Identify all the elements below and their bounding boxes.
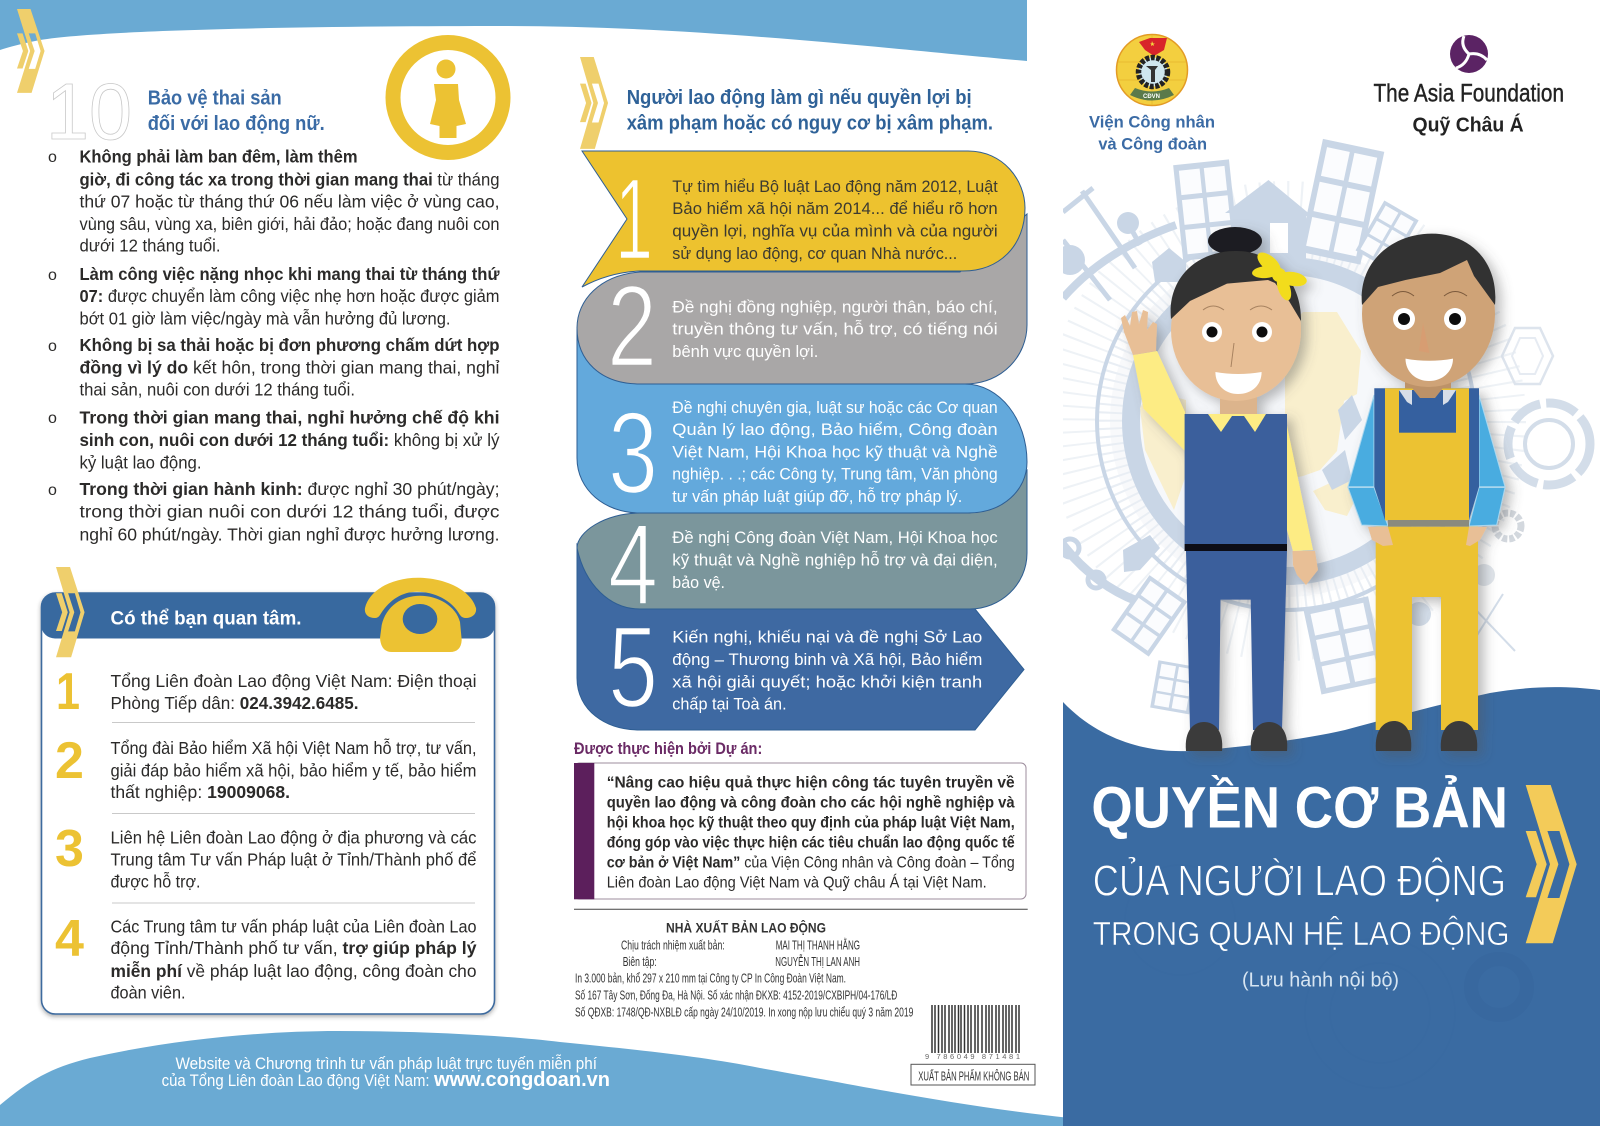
panel: project description: “Nâng cao hiệu quả thực hiện công tác tuyên truyền về <box>607 774 1015 791</box>
bulleted list: maternity rights: thai sản, nuôi con dưới 12 tháng tuổi. <box>80 380 355 400</box>
cover title: QUYỀN CƠ BẢN <box>1091 775 1508 840</box>
item 2 <box>55 732 476 802</box>
step 4 ribbon <box>577 470 1027 609</box>
institute name: Viện Công nhân <box>1089 112 1215 131</box>
foundation name: The Asia Foundation <box>1374 80 1564 108</box>
bulleted list: maternity rights: Không phải làm ban đêm, làm thêm <box>80 146 358 166</box>
top blue band <box>0 0 1027 61</box>
background illustration: globe, wheel and buildings <box>1055 143 1590 713</box>
bulleted list: maternity rights: trong thời gian nuôi con dưới 12 tháng tuổi, được <box>80 502 500 522</box>
bottom blue band <box>0 1031 1070 1126</box>
logo: union institute: CĐVN <box>1143 94 1160 100</box>
belt <box>1185 544 1287 551</box>
bulleted list: maternity rights: sinh con, nuôi con dưới 12 tháng tuổi: không bị xử lý <box>80 430 500 450</box>
publisher information: Số 167 Tây Sơn, Đống Đa, Hà Nội. Số xác nhận ĐKXB: 4152-2019/CXBIPH/04-176/LĐ <box>575 987 897 1002</box>
bulleted list: maternity rights: 07: được chuyển làm công việc nhẹ hơn hoặc được giảm <box>80 286 500 306</box>
heading: maternity protection <box>148 88 325 135</box>
publisher information: NGUYỄN THỊ LAN ANH <box>775 954 860 969</box>
item 2: Tổng đài Bảo hiểm Xã hội Việt Nam hỗ trợ, tư vấn, <box>110 737 476 758</box>
eyes <box>1202 322 1272 342</box>
publisher information <box>575 920 913 1020</box>
hands <box>1368 527 1393 546</box>
icon: top-left chevron <box>17 9 45 93</box>
item 1: Tổng Liên đoàn Lao động Việt Nam: Điện thoại <box>110 671 476 691</box>
neck <box>1405 378 1451 398</box>
bulleted list: maternity rights: giờ, đi công tác xa trong thời gian mang thai từ tháng <box>80 170 500 190</box>
cover title <box>1091 775 1510 952</box>
logo: union institute <box>1116 34 1188 106</box>
footer website text: www.congdoan.vn <box>433 1069 610 1091</box>
step 3 number and text: tư vấn pháp luật giúp đỡ, hỗ trợ pháp lý. <box>672 487 962 506</box>
hair ornament <box>1252 249 1308 302</box>
item 3: Liên hệ Liên đoàn Lao động ở địa phương và các <box>110 827 477 847</box>
publisher information: Chịu trách nhiệm xuất bản: <box>621 937 725 952</box>
blue lower cover area <box>1063 687 1600 1126</box>
step 5 ribbon <box>577 544 1024 730</box>
item 4: 4 <box>55 910 84 968</box>
icon: cover chevron <box>1526 785 1577 943</box>
panel: cover <box>1063 139 1600 1126</box>
step 3 number and text: Đề nghị chuyên gia, luật sư hoặc các Cơ quan <box>672 398 998 417</box>
step 4 number and text: kỹ thuật và Nghề nghiệp hỗ trợ và đại diện, <box>672 550 998 569</box>
trousers <box>1186 551 1287 730</box>
vest <box>1185 414 1287 544</box>
step 5 number and text: Kiến nghị, khiếu nại và đề nghị Sở Lao <box>672 628 982 647</box>
footer website text: của Tổng Liên đoàn Lao động Việt Nam: <box>162 1072 430 1090</box>
step 3 number and text: Quản lý lao động, Bảo hiểm, Công đoàn <box>672 420 998 439</box>
barcode <box>925 1005 1020 1061</box>
panel: project description <box>574 763 1026 899</box>
step 1 number and text: sử dụng lao động, cơ quan Nhà nước... <box>672 244 957 263</box>
heading: what workers should do: Người lao động làm gì nếu quyền lợi bị <box>627 87 972 109</box>
trousers <box>1376 527 1478 730</box>
step 3 ribbon <box>577 330 1027 513</box>
face <box>1171 259 1301 401</box>
bulleted list: maternity rights: kỷ luật lao động. <box>80 452 202 472</box>
step 5 number and text: chấp tại Toà án. <box>672 695 787 714</box>
bulleted list: maternity rights: o <box>48 267 57 284</box>
overall bib <box>1385 388 1469 520</box>
bulleted list: maternity rights: đồng vì lý do kết hôn, trong thời gian mang thai, nghỉ <box>80 358 500 378</box>
step 1 ribbon <box>582 151 1025 287</box>
step 1 number and text: quyền lợi, nghĩa vụ của mình và của người <box>672 221 998 240</box>
step 4 number and text <box>608 500 998 630</box>
contact header bar <box>41 592 495 638</box>
bulleted list: maternity rights: dưới 12 tháng tuổi. <box>80 236 220 256</box>
panel: project description: cơ bản ở Việt Nam” của Viện Công nhân và Công đoàn – Tổng <box>607 855 1015 872</box>
smile <box>1406 359 1453 381</box>
barcode: 9 786049 871481 <box>925 1052 1020 1061</box>
publisher information: In 3.000 bản, khổ 297 x 210 mm tại Công ty CP In Công Đoàn Việt Nam. <box>575 970 846 985</box>
neck <box>1220 395 1257 417</box>
sleeves <box>1348 395 1505 526</box>
ribbon: five steps <box>577 151 1027 730</box>
collar <box>1208 414 1266 432</box>
bulleted list: maternity rights <box>48 146 500 544</box>
belt <box>1388 520 1469 527</box>
contact heading: Có thể bạn quan tâm. <box>110 608 302 629</box>
step 2 ribbon <box>577 214 1027 384</box>
step 5 number and text: xã hội giải quyết; hoặc khởi kiện tranh <box>672 672 982 691</box>
big outlined number 10: 10 <box>46 67 132 156</box>
smile <box>1215 372 1262 394</box>
publisher information: Biên tập: <box>623 954 657 969</box>
step 2 number and text: truyền thông tư vấn, hỗ trợ, có tiếng nói <box>672 320 998 339</box>
stamp: not for sale: XUẤT BẢN PHẨM KHÔNG BÁN <box>918 1069 1029 1084</box>
character: woman <box>1121 227 1318 751</box>
panel: project description: Liên đoàn Lao động Việt Nam và Quỹ châu Á tại Việt Nam. <box>607 875 987 892</box>
bun <box>1208 227 1262 255</box>
bulleted list: maternity rights: Làm công việc nặng nhọc khi mang thai từ tháng thứ <box>80 264 500 284</box>
cover title: CỦA NGƯỜI LAO ĐỘNG <box>1093 855 1506 906</box>
cover title: TRONG QUAN HỆ LAO ĐỘNG <box>1093 915 1510 952</box>
heading: what workers should do: xâm phạm hoặc có nguy cơ bị xâm phạm. <box>627 112 993 134</box>
bulleted list: maternity rights: o <box>48 482 57 499</box>
publisher information: NHÀ XUẤT BẢN LAO ĐỘNG <box>666 920 826 935</box>
step 4 number and text: Đề nghị Công đoàn Việt Nam, Hội Khoa học <box>672 528 998 547</box>
bulleted list: maternity rights: o <box>48 149 57 166</box>
footer website text: Website và Chương trình tư vấn pháp luật trực tuyến miễn phí <box>176 1054 597 1073</box>
shoes <box>1186 722 1222 751</box>
right arm <box>1287 426 1313 551</box>
item 4: miễn phí về pháp luật lao động, công đoàn cho <box>110 960 476 981</box>
panel: project description: hội khoa học kỹ thuật theo quy định của pháp luật Việt Nam, <box>607 815 1015 832</box>
item 4 <box>55 910 477 1003</box>
step 3 number and text: Việt Nam, Hội Khoa học kỹ thuật và Nghề <box>672 442 998 461</box>
foundation name: Quỹ Châu Á <box>1412 114 1524 137</box>
bulleted list: maternity rights: vùng sâu, vùng xa, biên giới, hải đảo; hoặc đang nuôi con <box>80 214 500 234</box>
faint gears on cover <box>1125 865 1527 1088</box>
bulleted list: maternity rights: o <box>48 410 57 427</box>
footer website text <box>162 1054 610 1091</box>
step 1 number and text <box>615 154 998 284</box>
item 1: 1 <box>56 663 80 721</box>
logo: The Asia Foundation <box>1450 35 1488 73</box>
hair <box>1362 234 1495 305</box>
heading: what workers should do <box>627 87 993 134</box>
step 5 number and text <box>608 602 982 732</box>
publisher information: MAI THỊ THANH HẰNG <box>776 937 860 952</box>
step 4 number and text: 4 <box>608 500 658 630</box>
heading: maternity protection: Bảo vệ thai sản <box>148 88 282 110</box>
institute name <box>1089 112 1215 153</box>
bulleted list: maternity rights: thứ 07 hoặc từ tháng thứ 06 nếu làm việc ở vùng cao, <box>80 192 500 212</box>
step 3 number and text: 3 <box>608 388 658 518</box>
eyes <box>1393 308 1466 330</box>
icon: chevron on contact box <box>56 567 85 657</box>
stamp: not for sale <box>911 1064 1035 1085</box>
panel: contact box <box>41 567 495 1014</box>
item 3: Trung tâm Tư vấn Pháp luật ở Tỉnh/Thành phố để <box>110 849 476 869</box>
shirt <box>1374 388 1479 520</box>
bulleted list: maternity rights: Trong thời gian hành kinh: được nghỉ 30 phút/ngày; <box>80 479 500 499</box>
step 3 number and text: nghiệp. . .; các Công ty, Trung tâm, Văn phòng <box>672 465 998 484</box>
step 2 number and text: bênh vực quyền lợi. <box>672 342 818 361</box>
icon: woman in yellow circle <box>393 42 503 152</box>
item 2: 2 <box>55 732 84 790</box>
item 1 <box>56 663 476 721</box>
waving arm <box>1133 351 1185 451</box>
bulleted list: maternity rights: nghỉ 60 phút/ngày. Thời gian nghỉ được hưởng lương. <box>80 524 500 544</box>
item 3: được hỗ trợ. <box>110 870 200 891</box>
step 5 number and text: động – Thương binh và Xã hội, Bảo hiểm <box>672 650 982 669</box>
shoes <box>1376 721 1411 751</box>
step 1 number and text: Bảo hiểm xã hội năm 2014... để hiểu rõ hơn <box>672 199 998 218</box>
panel: project description: quyền lao động và công đoàn cho các hội nghề nghiệp và <box>607 795 1015 812</box>
item 3 <box>55 820 477 891</box>
face <box>1362 241 1495 387</box>
hair <box>1171 251 1301 321</box>
icon: telephone <box>365 578 476 652</box>
step 5 number and text: 5 <box>608 602 658 732</box>
icon: middle panel chevron <box>580 57 608 149</box>
institute name: và Công đoàn <box>1098 134 1207 153</box>
item 2: thất nghiệp: 19009068. <box>110 782 290 802</box>
bulleted list: maternity rights: o <box>48 338 57 355</box>
item 1: Phòng Tiếp dân: 024.3942.6485. <box>110 693 358 713</box>
item 4: Các Trung tâm tư vấn pháp luật của Liên đoàn Lao <box>110 917 476 937</box>
item 4: đoàn viên. <box>110 983 186 1003</box>
bulleted list: maternity rights: Trong thời gian mang thai, nghỉ hưởng chế độ khi <box>80 408 499 428</box>
item 3: 3 <box>55 820 84 878</box>
bulleted list: maternity rights: Không bị sa thải hoặc bị đơn phương chấm dứt hợp <box>80 335 500 355</box>
step 2 number and text: Đề nghị đồng nghiệp, người thân, báo chí, <box>672 297 998 316</box>
item 2: giải đáp bảo hiểm xã hội, bảo hiểm y tế, bảo hiểm <box>110 761 476 781</box>
publisher information: Số QĐXB: 1748/QĐ-NXBLĐ cấp ngày 24/10/2019. In xong nộp lưu chiểu quý 3 năm 2019 <box>575 1005 913 1020</box>
step 4 number and text: bảo vệ. <box>672 573 725 592</box>
pocket <box>1399 390 1456 433</box>
panel: project description: đóng góp vào việc thực hiện các tiêu chuẩn lao động quốc tế <box>607 835 1015 852</box>
step 2 number and text: 2 <box>607 261 657 391</box>
step 1 number and text: 1 <box>615 154 653 284</box>
character: man <box>1348 234 1505 751</box>
internal circulation note: (Lưu hành nội bộ) <box>1242 970 1399 992</box>
heading: maternity protection: đối với lao động nữ. <box>148 113 325 135</box>
item 4: động Tỉnh/Thành phố tư vấn, trợ giúp pháp lý <box>110 938 477 958</box>
bulleted list: maternity rights: bớt 01 giờ làm việc/ngày mà vẫn hưởng đủ lương. <box>80 307 450 328</box>
step 2 number and text <box>607 261 998 391</box>
step 1 number and text: Tự tìm hiểu Bộ luật Lao động năm 2012, Luật <box>672 177 998 196</box>
project heading: Được thực hiện bởi Dự án: <box>574 740 762 758</box>
step 3 number and text <box>608 388 998 518</box>
foundation name <box>1374 80 1564 137</box>
